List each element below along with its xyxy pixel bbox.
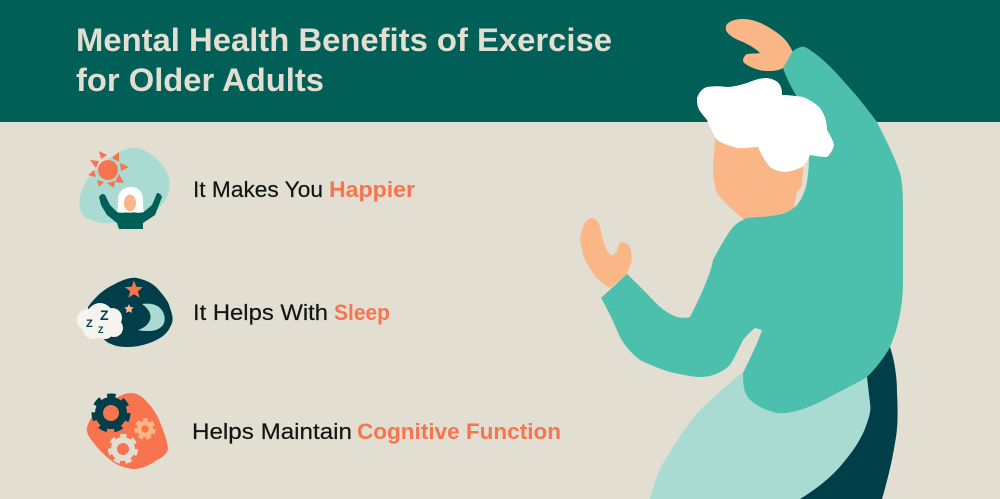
icon: z letters	[86, 307, 109, 335]
icon: big star	[125, 280, 143, 298]
icon: beige gear	[110, 436, 136, 462]
icon: sleep	[77, 278, 173, 347]
label: It Helps With Sleep	[193, 300, 390, 325]
label: It Helps With Sleep: It Helps With	[193, 300, 328, 325]
raised hand	[726, 19, 793, 71]
label: Helps Maintain Cognitive Function: Helps Maintain	[192, 419, 352, 444]
label: Helps Maintain Cognitive Function	[192, 419, 561, 444]
icon: happy person with sun	[79, 148, 170, 229]
label: Helps Maintain Cognitive Function: Cognitive Function	[357, 419, 561, 444]
face	[713, 130, 804, 222]
icon: dark gear	[94, 396, 128, 430]
dark back leg	[780, 347, 898, 499]
icon: small star	[124, 304, 134, 313]
icon: sun	[88, 151, 129, 188]
icon: z letters: Z	[98, 325, 104, 335]
title	[76, 22, 612, 98]
icon: z letters: Z	[100, 307, 109, 323]
label: It Makes You Happier: Happier	[329, 177, 415, 202]
icon: z letters: Z	[86, 318, 93, 330]
icon: peach gear	[136, 420, 154, 438]
lower hand	[580, 218, 632, 288]
header band	[0, 0, 1000, 122]
white hair	[697, 78, 834, 172]
label: It Makes You Happier: It Makes You	[193, 177, 323, 202]
teal sweater	[601, 47, 903, 413]
illustration: older woman exercising	[580, 19, 903, 499]
icon: moon	[138, 304, 165, 331]
title: for Older Adults	[76, 62, 324, 98]
icon: person hair	[117, 187, 144, 213]
label: It Makes You Happier	[193, 177, 415, 202]
title: Mental Health Benefits of Exercise	[76, 22, 612, 58]
icon: cloud	[77, 303, 123, 339]
light front leg	[650, 360, 870, 499]
icon: cognitive gears	[87, 393, 168, 469]
icon: person body	[99, 193, 162, 229]
icon: person face	[124, 194, 136, 212]
label: It Helps With Sleep: Sleep	[334, 300, 390, 325]
